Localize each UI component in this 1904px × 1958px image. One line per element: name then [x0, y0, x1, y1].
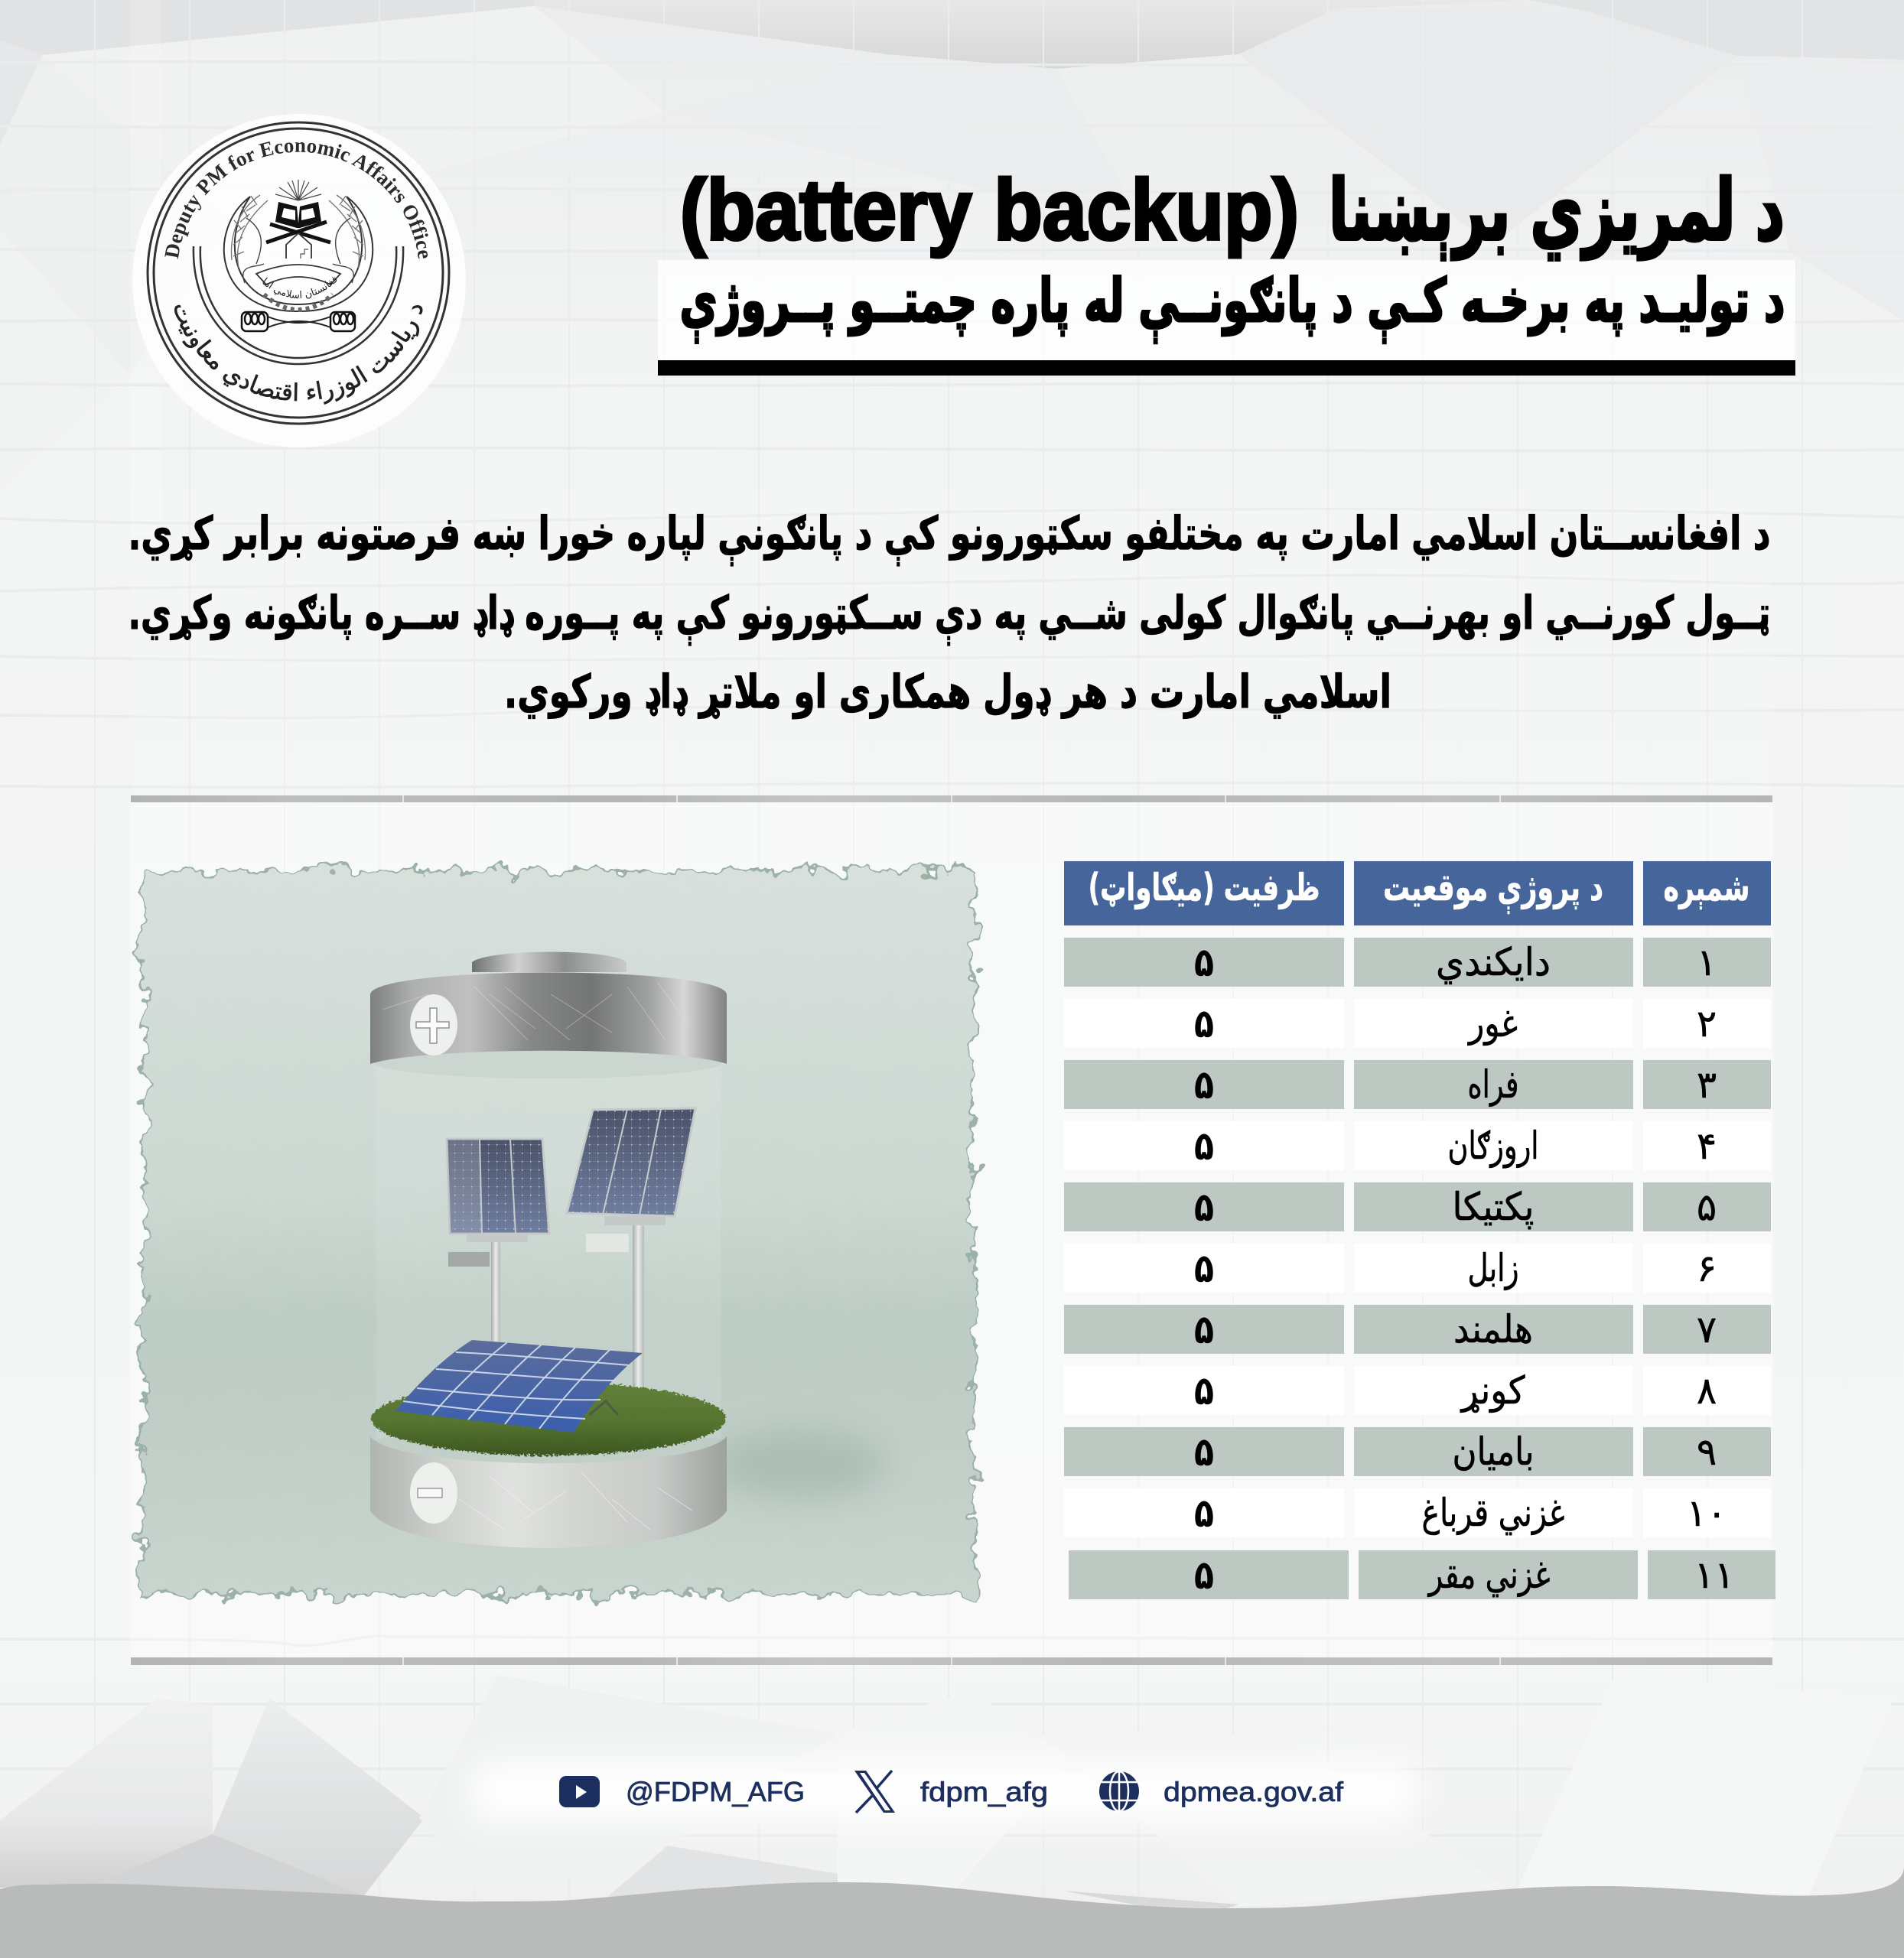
- header: number: شمېره: [1663, 866, 1750, 909]
- header: number: [1643, 861, 1771, 925]
- row 6: [1064, 1244, 1771, 1293]
- row 1: [1064, 938, 1771, 987]
- cap interior: [374, 1046, 723, 1078]
- logo: circular seal: [132, 114, 466, 447]
- seal english text: Deputy PM for Economic Affairs Office: [164, 141, 428, 259]
- table header: [1064, 861, 1771, 925]
- X handle: fdpm_afg: [920, 1776, 1048, 1807]
- cap scratches: [382, 983, 688, 1040]
- title block: [658, 161, 1795, 376]
- row 4: ۵: [1194, 1124, 1214, 1169]
- website: dpmea.gov.af: [1164, 1776, 1344, 1807]
- row 2: ۲: [1697, 1002, 1717, 1046]
- row 1: دایکندي: [1436, 940, 1551, 984]
- row 11: غزني مقر: [1427, 1553, 1550, 1597]
- row 11: [1069, 1550, 1775, 1599]
- row 10: غزني قرباغ: [1421, 1491, 1565, 1535]
- seal outer rings: [148, 122, 449, 424]
- front curved solar panel: [395, 1340, 643, 1433]
- intro paragraph: [129, 507, 1770, 719]
- glass cylinder: [376, 1067, 721, 1438]
- base metal: [370, 1436, 727, 1548]
- row 9: ۵: [1194, 1429, 1214, 1475]
- icon: globe: [1099, 1771, 1139, 1811]
- row 11: ۱۱: [1694, 1553, 1734, 1597]
- row 2: غور: [1466, 1001, 1518, 1046]
- row 6: زابل: [1467, 1246, 1519, 1290]
- emblem book: [275, 202, 321, 228]
- video handle: @FDPM_AFG: [626, 1776, 805, 1807]
- header: capacity: ظرفیت (میګاواټ): [1088, 866, 1320, 910]
- row 8: ۸: [1697, 1369, 1717, 1413]
- panel brackets: [467, 1216, 666, 1242]
- rear right solar panel: [567, 1108, 695, 1216]
- row 7: ۷: [1697, 1308, 1717, 1351]
- header: capacity: [1064, 861, 1344, 925]
- emblem: [223, 180, 373, 332]
- row 5: ۵: [1194, 1185, 1214, 1231]
- illustration wobbly card: [142, 870, 975, 1594]
- row 10: [1064, 1488, 1771, 1537]
- emblem mihrab: [286, 233, 311, 259]
- base shadow: [711, 1430, 887, 1499]
- cap band: [370, 973, 727, 1064]
- emblem sun rays: [275, 180, 321, 200]
- title line 1 latin: (battery backup): [680, 162, 1299, 258]
- row 4: [1064, 1121, 1771, 1170]
- row 3: فراه: [1467, 1062, 1519, 1107]
- row 9: [1064, 1427, 1771, 1476]
- title white backing: [658, 260, 1795, 360]
- left pole and box: [448, 1242, 500, 1342]
- rear left solar panel: [447, 1139, 549, 1234]
- row 10: ۱۰: [1687, 1491, 1727, 1535]
- plus terminal: [410, 994, 457, 1055]
- intro line 3: اسلامي امارت د هر ډول همکاری او ملاتړ ډاډ ورکوي.: [504, 665, 1391, 719]
- row 4: اروزګان: [1447, 1124, 1539, 1169]
- row 11: ۵: [1194, 1553, 1214, 1599]
- grass disk: [371, 1382, 726, 1455]
- row 2: ۵: [1194, 1001, 1214, 1047]
- row 7: [1064, 1305, 1771, 1354]
- icon: video channel: [559, 1776, 600, 1807]
- row 3: ۵: [1194, 1062, 1214, 1108]
- row 7: ۵: [1194, 1307, 1214, 1353]
- cap nub: [472, 951, 627, 972]
- emblem crescent: [224, 197, 373, 311]
- title black bar: [658, 360, 1795, 376]
- row 6: ۵: [1194, 1246, 1214, 1292]
- footer bottom wave: [0, 1866, 1904, 1958]
- row 3: ۳: [1697, 1063, 1717, 1107]
- emblem scroll ribbon: [268, 317, 330, 327]
- row 6: ۶: [1697, 1247, 1717, 1290]
- row 9: ۹: [1697, 1430, 1717, 1474]
- row 5: پکتیکا: [1452, 1185, 1535, 1229]
- row 2: [1064, 999, 1771, 1048]
- emblem wheat wreath: [231, 195, 366, 283]
- header: location: [1354, 861, 1633, 925]
- base scratches: [459, 1472, 692, 1530]
- seal pashto text: د ریاست الوزراء اقتصادي معاونیت: [174, 304, 422, 405]
- row 7: هلمند: [1453, 1307, 1533, 1351]
- top divider rule: [131, 795, 1772, 802]
- emblem ribbon: [256, 265, 340, 285]
- row 3: [1064, 1060, 1771, 1109]
- bottom divider rule: [131, 1657, 1772, 1665]
- seal inner double arc: [194, 246, 403, 364]
- row 5: [1064, 1182, 1771, 1231]
- row 5: ۵: [1697, 1186, 1717, 1229]
- minus terminal: [410, 1462, 457, 1524]
- row 4: ۴: [1697, 1124, 1717, 1168]
- row 1: ۱: [1697, 941, 1717, 984]
- row 8: ۵: [1194, 1368, 1214, 1414]
- row 1: ۵: [1194, 940, 1214, 986]
- emblem left scroll: [242, 312, 268, 331]
- footer social links: [559, 1771, 1344, 1813]
- illustration: battery with solar panels: [142, 870, 975, 1594]
- icon: X logo: [854, 1771, 895, 1813]
- row 8: کونړ: [1460, 1368, 1525, 1413]
- table: [1064, 861, 1775, 1599]
- seal white halo: [132, 114, 466, 447]
- row 9: بامیان: [1452, 1429, 1535, 1474]
- row 10: ۵: [1194, 1491, 1214, 1537]
- row 8: [1064, 1366, 1771, 1415]
- footer white glow: [474, 1763, 1415, 1820]
- header: location: د پروژې موقعیت: [1383, 866, 1603, 914]
- emblem crossed swords: [266, 222, 330, 242]
- emblem gear: [264, 294, 333, 310]
- right pole and box: [586, 1225, 644, 1401]
- emblem right scroll: [330, 312, 355, 331]
